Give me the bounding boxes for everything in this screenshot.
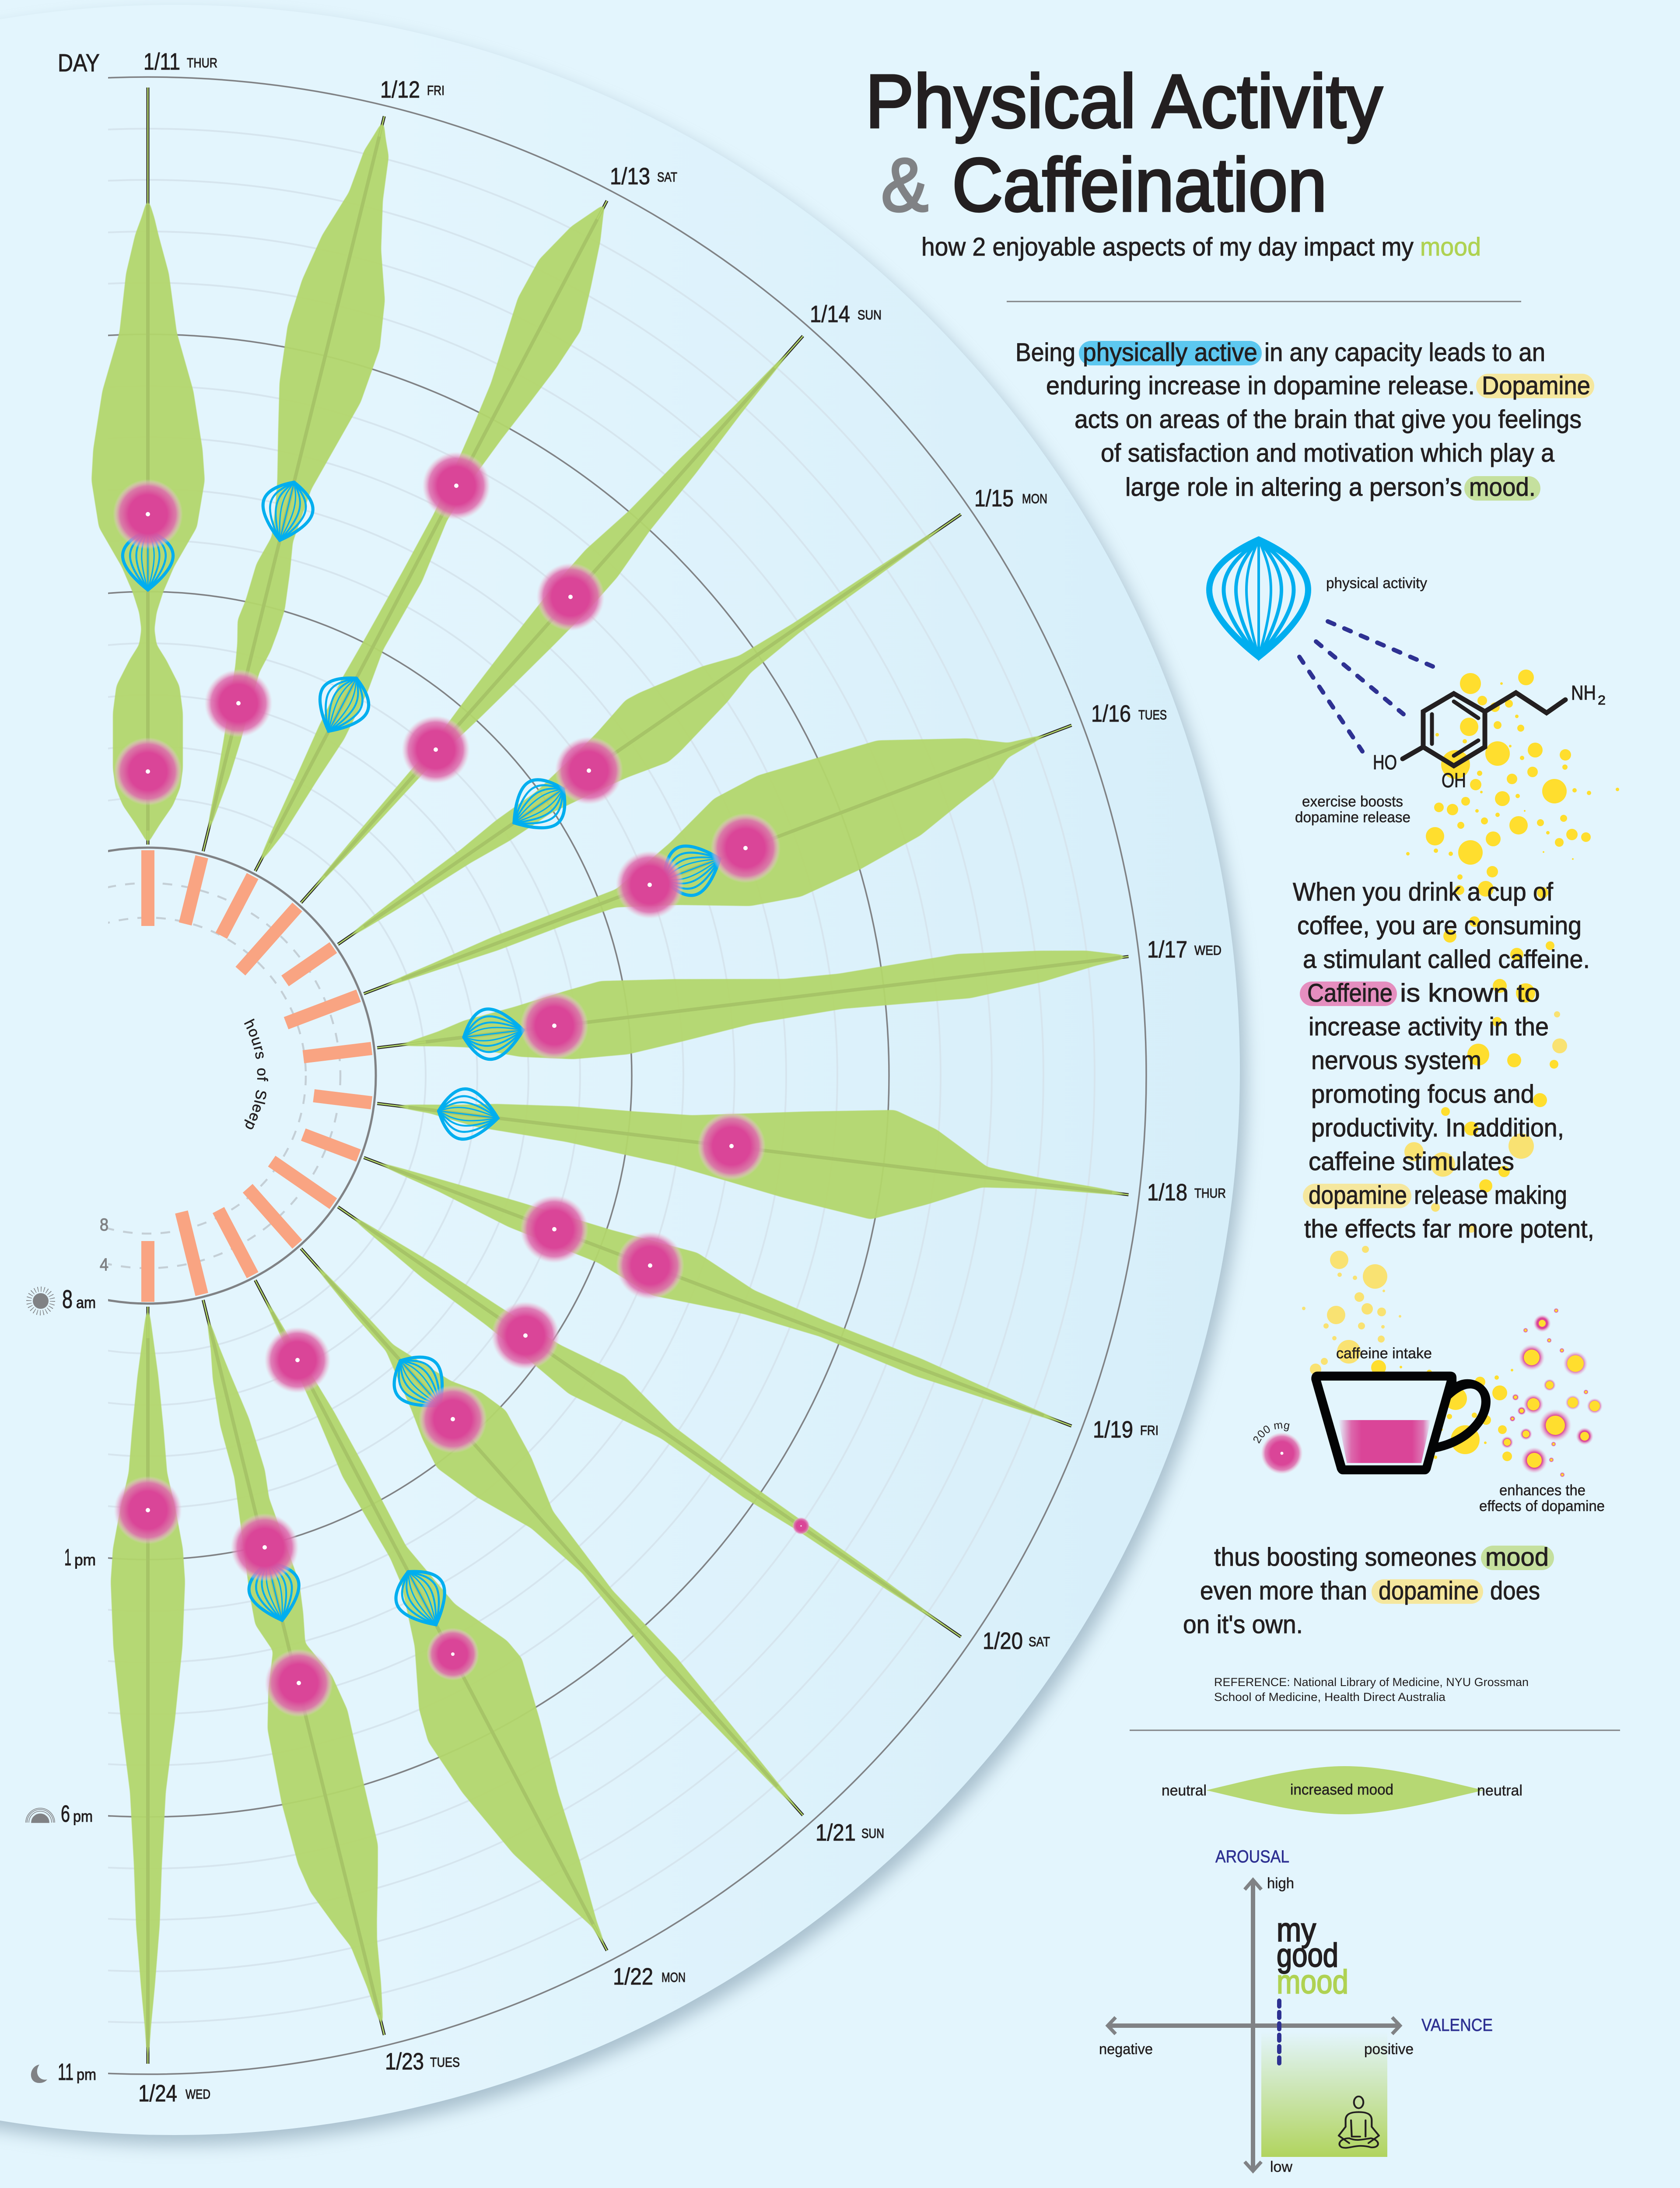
axis labels: positive [1364, 2041, 1414, 2058]
leaf: 1/17 [372, 917, 1133, 1084]
leaf: 1/20 [325, 1187, 974, 1655]
physical activity markers [122, 476, 729, 1637]
caffeine dose marker: 200 mg [1250, 1419, 1291, 1445]
intro paragraph: enduring increase in dopamine release. [1046, 372, 1475, 400]
icon: moon [31, 2065, 47, 2083]
date labels: TUES [1138, 707, 1167, 722]
background disk [0, 5, 1240, 2135]
day axis title: DAY [58, 49, 100, 77]
leaf: 1/18 [371, 1048, 1135, 1250]
subtitle: how 2 enjoyable aspects of my day impact my [921, 233, 1414, 261]
caffeine paragraph [1293, 878, 1594, 1243]
date labels: MON [662, 1970, 686, 1985]
time of day labels: pm [74, 1551, 96, 1569]
date labels: 1/16 [1091, 701, 1131, 727]
dashed marker [1277, 2001, 1281, 2069]
icon: activity 1/17 [461, 1005, 526, 1062]
date labels: THUR [1194, 1185, 1226, 1201]
icon: physical activity [1209, 540, 1308, 657]
legend: mood leaf: neutral [1162, 1782, 1207, 1799]
caffeine paragraph: dopamine [1309, 1181, 1407, 1210]
icon: activity 1/23 [243, 1556, 307, 1627]
leaf: 1/23 [160, 1290, 425, 2046]
icon: activity 1/16 [655, 835, 729, 904]
closing paragraph: mood [1485, 1543, 1549, 1571]
date labels: SUN [858, 307, 882, 323]
icon: activity 1/15 [500, 768, 578, 844]
icon: sun [29, 1289, 52, 1313]
intro paragraph: mood. [1469, 473, 1536, 501]
leaf: 1/15 [317, 484, 982, 975]
intro paragraph: large role in altering a person’s [1125, 473, 1462, 501]
icon: meditating figure [1339, 2097, 1379, 2148]
date labels: 1/13 [610, 163, 650, 189]
molecule: dopamine [1373, 681, 1606, 792]
molecule: dopamine: NH [1571, 681, 1596, 704]
sleep scale labels: 8 [100, 1215, 108, 1234]
date labels: 1/23 [385, 2048, 424, 2075]
enhances caption: enhances the [1499, 1482, 1586, 1499]
date labels: 1/21 [816, 1820, 856, 1846]
date labels: WED [186, 2086, 210, 2102]
intro paragraph [1015, 338, 1594, 501]
my good mood label: my [1277, 1911, 1316, 1949]
references: REFERENCE: National Library of Medicine, NYU Grossman [1214, 1676, 1529, 1689]
sleep scale labels: 4 [100, 1255, 108, 1274]
time of day labels: 8 [62, 1285, 73, 1314]
yellow bubbles around cup [1371, 1360, 1513, 1461]
leaf: 1/21 [268, 1218, 837, 1844]
time of day labels: pm [77, 2065, 96, 2083]
references [1214, 1676, 1529, 1704]
date labels: WED [1194, 943, 1222, 958]
time of day labels: 11 [58, 2059, 74, 2085]
icon: activity 1/13 [306, 666, 379, 743]
closing paragraph: dopamine [1379, 1577, 1479, 1605]
axis labels: VALENCE [1421, 2016, 1493, 2035]
caffeine paragraph: caffeine stimulates [1309, 1147, 1514, 1176]
date labels: FRI [427, 83, 444, 98]
caffeine paragraph: a stimulant called caffeine. [1303, 945, 1590, 974]
date labels: 1/15 [974, 485, 1014, 512]
axis labels: low [1270, 2159, 1292, 2175]
date labels: TUES [430, 2055, 460, 2070]
molecule: dopamine: HO [1373, 751, 1397, 774]
caffeine paragraph: When you drink a cup of [1293, 878, 1554, 906]
closing paragraph: on it's own. [1183, 1610, 1303, 1639]
caffeine paragraph: nervous system [1311, 1046, 1481, 1075]
icon: sunset [26, 1808, 55, 1823]
legend: mood leaf [1162, 1766, 1522, 1814]
legend: mood leaf: neutral [1477, 1782, 1522, 1799]
date labels [138, 49, 1226, 2107]
caffeine paragraph: release making [1414, 1181, 1567, 1210]
axis labels [1099, 1847, 1493, 2175]
leaf: 1/24 [111, 1307, 185, 2064]
intro paragraph: physically active [1083, 338, 1257, 367]
physical activity label: physical activity [1326, 575, 1427, 592]
date labels: MON [1022, 491, 1047, 506]
closing paragraph: thus boosting someones [1214, 1543, 1477, 1571]
subtitle: mood [1420, 233, 1481, 261]
sleep hours bars [141, 850, 372, 1302]
exercise caption: exercise boosts [1302, 793, 1403, 810]
exercise caption [1295, 793, 1410, 826]
intro paragraph: acts on areas of the brain that give you feelings [1074, 405, 1582, 434]
leaf: 1/19 [354, 1130, 1082, 1451]
icon: activity 1/11 [122, 530, 173, 590]
date labels: SUN [861, 1826, 884, 1841]
date labels: 1/22 [613, 1964, 653, 1990]
divider [1007, 301, 1521, 302]
pale caffeine bubbles [1302, 1011, 1567, 1375]
exercise caption: dopamine release [1295, 809, 1410, 826]
leaf: 1/12 [161, 106, 434, 863]
sleep scale labels [100, 1215, 108, 1274]
caffeine dose marker [1250, 1419, 1305, 1474]
enhanced dopamine bubbles [1501, 1308, 1603, 1477]
my good mood label: good [1277, 1937, 1338, 1974]
caffeine paragraph: Caffeine [1307, 979, 1393, 1007]
icon: activity 1/21 [382, 1344, 459, 1422]
enhances caption [1479, 1482, 1605, 1515]
closing paragraph: does [1490, 1577, 1540, 1605]
caffeine intake label: caffeine intake [1336, 1345, 1432, 1362]
time of day labels: pm [73, 1807, 93, 1825]
date labels: 1/19 [1093, 1417, 1133, 1443]
axis labels: AROUSAL [1215, 1847, 1289, 1866]
date labels: 1/17 [1147, 936, 1187, 963]
caffeine paragraph: promoting focus and [1311, 1080, 1534, 1108]
caffeine markers [113, 452, 810, 1717]
disk shadow [0, 14, 1246, 2145]
caffeine paragraph: increase activity in the [1309, 1013, 1549, 1041]
leaf: 1/13 [225, 185, 640, 888]
caffeine paragraph: coffee, you are consuming [1297, 912, 1582, 940]
molecule: dopamine: 2 [1598, 693, 1606, 708]
hours of sleep label [228, 1017, 271, 1151]
leaf: 1/11 [91, 88, 205, 845]
dopamine bubbles [1406, 670, 1619, 1192]
arrows: activity to dopamine [1299, 621, 1433, 751]
leaf: 1/16 [341, 665, 1094, 1054]
date labels: FRI [1140, 1423, 1158, 1438]
intro paragraph: of satisfaction and motivation which play a [1101, 439, 1555, 467]
intro paragraph: Dopamine [1482, 372, 1590, 400]
my good mood label [1277, 1911, 1348, 2001]
references: School of Medicine, Health Direct Australia [1214, 1690, 1446, 1704]
closing paragraph [1183, 1543, 1554, 1639]
date labels: SAT [1029, 1634, 1050, 1649]
date labels: 1/24 [138, 2080, 177, 2107]
axis labels: high [1267, 1875, 1294, 1892]
radial leaf chart [91, 88, 1135, 2064]
caffeine paragraph: productivity. In addition, [1311, 1114, 1564, 1142]
caffeine paragraph: is known to [1400, 979, 1540, 1007]
icon: coffee cup [1311, 1371, 1491, 1474]
caffeine paragraph: the effects far more potent, [1304, 1215, 1594, 1243]
date labels: THUR [187, 55, 217, 70]
time of day labels: 1 [64, 1544, 71, 1571]
title: Physical Activity [865, 59, 1382, 144]
good mood zone [1261, 2032, 1387, 2157]
intro paragraph: Being [1015, 338, 1075, 367]
time of day labels: 6 [61, 1801, 70, 1827]
time of day labels [58, 1285, 96, 2085]
date labels: 1/20 [983, 1628, 1023, 1654]
leaf: 1/22 [201, 1252, 661, 1979]
title: & [881, 142, 928, 227]
date labels: SAT [657, 169, 677, 185]
my good mood label: mood [1277, 1964, 1348, 2001]
molecule: dopamine: OH [1442, 769, 1466, 792]
title [865, 59, 1382, 227]
icon: activity 1/12 [256, 476, 318, 546]
intro paragraph: in any capacity leads to an [1264, 338, 1545, 367]
axes [1108, 1880, 1400, 2171]
icon: activity 1/18 [436, 1086, 501, 1143]
enhances caption: effects of dopamine [1479, 1498, 1605, 1515]
hours of sleep label: hours of Sleep [241, 1017, 271, 1133]
mood quadrant chart [1099, 1847, 1493, 2175]
divider [1130, 1729, 1620, 1731]
leaf: 1/14 [285, 322, 819, 917]
date labels: 1/18 [1147, 1179, 1187, 1206]
date labels: 1/12 [380, 77, 420, 103]
title: Caffeination [952, 142, 1327, 227]
time of day labels: am [76, 1294, 96, 1311]
date labels: 1/11 [144, 49, 180, 75]
axis labels: negative [1099, 2041, 1153, 2058]
icon: activity 1/22 [386, 1560, 458, 1637]
legend: mood leaf: increased mood [1290, 1781, 1393, 1798]
date labels: 1/14 [810, 301, 850, 327]
closing paragraph: even more than [1200, 1577, 1367, 1605]
